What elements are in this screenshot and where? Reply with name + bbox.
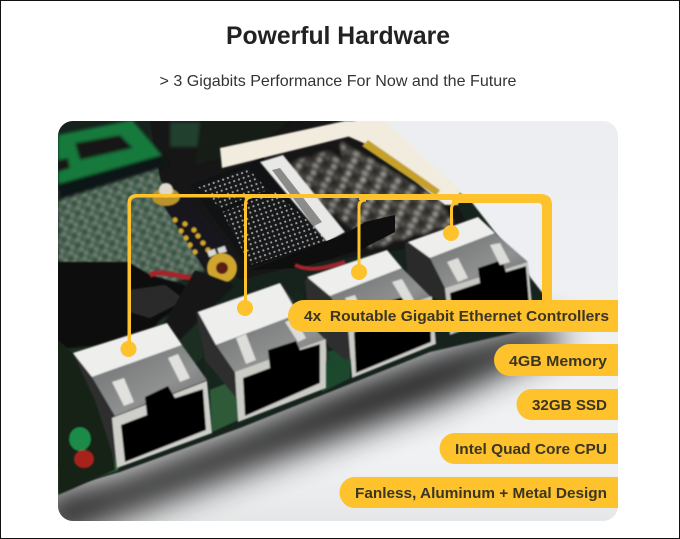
status LEDs: [69, 427, 94, 468]
green memory module: [58, 121, 202, 202]
battery and red wire: [50, 262, 345, 495]
white connector: [220, 121, 460, 205]
board shadow: [58, 332, 585, 521]
branch to port 3: [359, 200, 366, 272]
top centre dark board: [150, 121, 470, 280]
dot port 4: [443, 225, 459, 241]
pill: 4GB Memory: [494, 344, 618, 376]
pill: 32GB SSD: [516, 389, 618, 420]
circuit board: [50, 115, 548, 500]
dot port 3: [351, 264, 367, 280]
ethernet port 1: [73, 323, 212, 468]
ethernet port 2: [196, 283, 330, 422]
branch to port 2: [246, 197, 252, 308]
main bracket: [128, 194, 552, 349]
gold mounting holes: [152, 183, 237, 283]
ethernet port 3: [305, 250, 436, 378]
subtitle: > 3 Gigabits Performance For Now and the Future: [160, 73, 517, 90]
pad strip: [163, 202, 228, 271]
title: Powerful Hardware: [226, 22, 450, 50]
photo: router circuit board with ethernet ports: [40, 115, 618, 539]
dot port 2: [237, 300, 253, 316]
pill: Fanless, Aluminum + Metal Design: [340, 477, 618, 508]
ethernet port 4: [405, 217, 532, 335]
branch to port 4: [452, 203, 457, 233]
SSD module: [190, 150, 395, 270]
dot port 1: [120, 341, 136, 357]
pill: Intel Quad Core CPU: Intel Quad Core CPU: [455, 441, 607, 458]
pill: Fanless, Aluminum + Metal Design: Fanless, Aluminum + Metal Design: [355, 485, 607, 502]
pill: 32GB SSD: 32GB SSD: [532, 397, 607, 414]
pill: 4GB Memory: 4GB Memory: [509, 353, 608, 370]
pill: 4x Routable Gigabit Ethernet Controllers: 4x Routable Gigabit Ethernet Controllers: [304, 308, 609, 325]
pill: 4x Routable Gigabit Ethernet Controllers: [288, 300, 618, 332]
yellow connector lines: [120, 194, 552, 357]
pill: Intel Quad Core CPU: [440, 433, 618, 464]
